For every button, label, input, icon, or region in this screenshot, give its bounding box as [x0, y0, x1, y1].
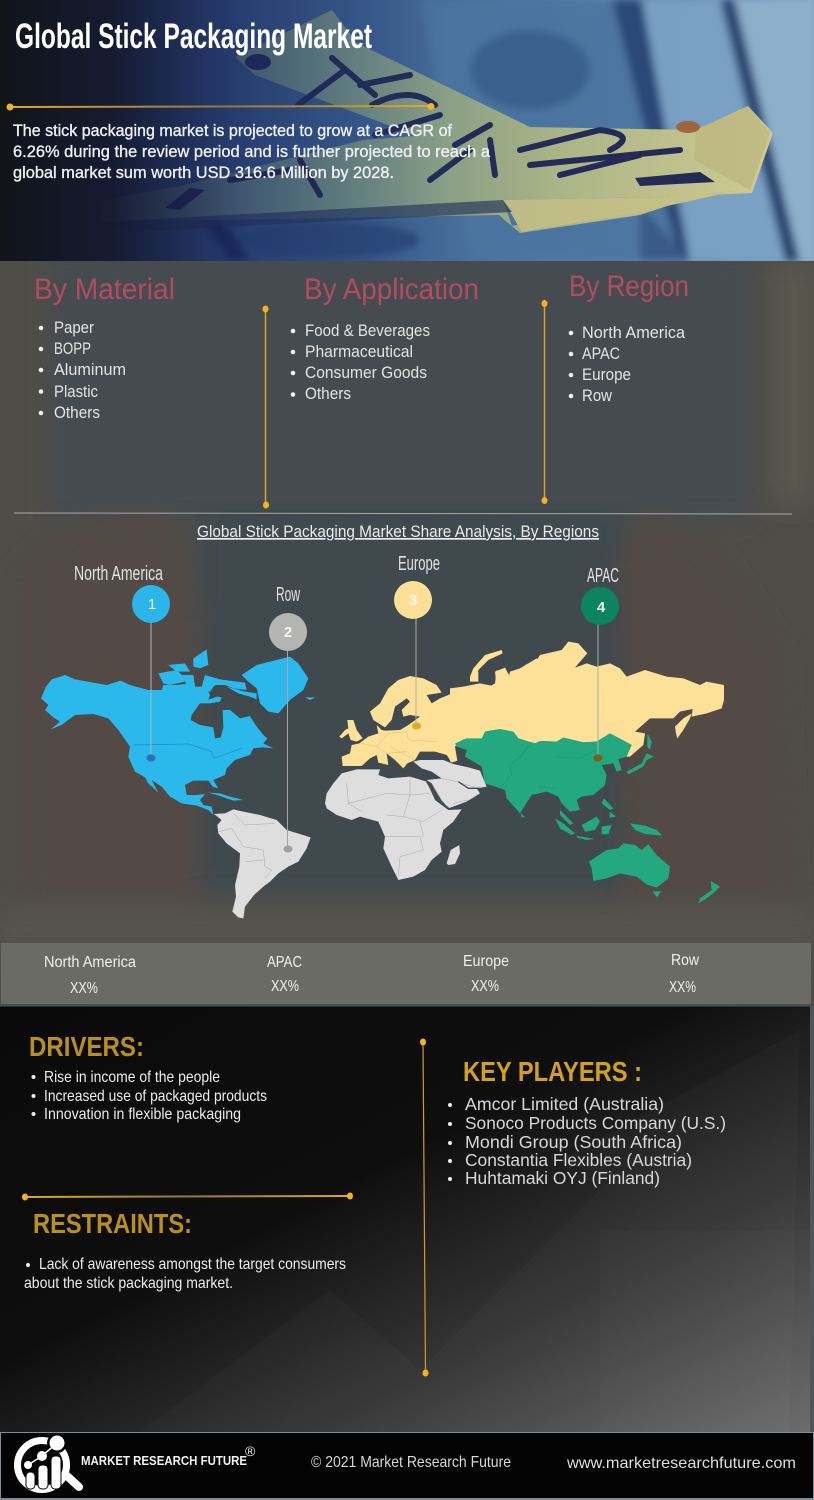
text block: drivers list	[32, 1069, 267, 1123]
panel: by application: Food & Beverages	[305, 321, 430, 340]
panel: market share table: XX%	[471, 978, 499, 995]
panel: by region	[569, 270, 689, 405]
panel: by material	[34, 273, 175, 422]
pin 4: apac	[581, 565, 619, 762]
text block: restraints: about the stick packaging market.	[24, 1275, 233, 1292]
pin 2: row	[269, 584, 307, 852]
panel: market share table: XX%	[70, 980, 98, 997]
region: africa and middle east	[325, 760, 487, 880]
panel: by application	[291, 273, 479, 403]
panel: by material: Aluminum	[54, 360, 126, 379]
pin 1: north america: 1	[148, 596, 156, 613]
footer bar	[0, 1432, 814, 1500]
pin 3: europe: 3	[409, 592, 417, 609]
panel: market share table	[1, 943, 811, 1004]
text block: hero summary: The stick packaging market is projected to grow at a CAGR of	[13, 121, 452, 140]
text block: hero summary: global market sum worth USD 316.6 Million by 2028.	[13, 163, 394, 182]
text block: key players list: Huhtamaki OYJ (Finland)	[465, 1168, 660, 1188]
footer bar: MARKET RESEARCH FUTURE	[81, 1454, 247, 1468]
text block: key players list	[448, 1094, 726, 1188]
panel: by material: Plastic	[54, 382, 98, 401]
footer bar: www.marketresearchfuture.com	[566, 1455, 796, 1472]
icon: market research future logo	[18, 1433, 79, 1490]
pin 1: north america	[74, 563, 170, 762]
panel: by region: North America	[582, 323, 686, 342]
text block: drivers list: Innovation in flexible packaging	[44, 1106, 241, 1123]
text block: hero summary	[13, 121, 491, 182]
title: Global Stick Packaging Market	[15, 17, 372, 56]
footer bar: ®	[245, 1443, 256, 1459]
region: south america	[214, 809, 311, 918]
footer bar: © 2021 Market Research Future	[311, 1454, 511, 1471]
text block: key players list: Constantia Flexibles (Austria)	[465, 1150, 692, 1170]
text block: key players list: Sonoco Products Company (U.S.)	[465, 1113, 726, 1133]
text block: hero summary: 6.26% during the review period and is further projected to reach a	[13, 142, 491, 161]
region: north america	[41, 649, 315, 815]
heading: key players: KEY PLAYERS :	[463, 1056, 642, 1087]
panel: by region: Europe	[582, 365, 631, 384]
panel: hero photo banner	[0, 0, 814, 261]
panel: market share table: XX%	[271, 978, 299, 995]
panel: by application: Pharmaceutical	[305, 342, 413, 361]
pin 4: apac: 4	[597, 599, 606, 616]
text block: restraints: Lack of awareness amongst the target consumers	[39, 1256, 346, 1273]
panel: by material: By Material	[34, 273, 175, 306]
region: apac	[455, 729, 720, 903]
panel: by region: By Region	[569, 270, 689, 303]
region: europe and russia	[339, 642, 724, 768]
panel: market share table: XX%	[669, 979, 696, 996]
text block: drivers list: Increased use of packaged products	[44, 1088, 267, 1105]
pin 2: row: 2	[284, 624, 292, 641]
divider: material application line	[262, 306, 269, 508]
divider: hero gold line	[6, 103, 434, 110]
chart: world map	[41, 642, 724, 918]
panel: market share table: North America	[44, 954, 136, 971]
text block: restraints	[24, 1256, 346, 1292]
panel: by material: BOPP	[54, 339, 91, 358]
picture: candy bars	[100, 10, 773, 233]
panel: market share table: Europe	[463, 953, 509, 970]
panel: by application: Others	[305, 384, 351, 403]
pin 4: apac: APAC	[587, 565, 619, 587]
text block: key players list: Mondi Group (South Africa)	[465, 1132, 682, 1152]
panel: segmentation and map background	[0, 250, 814, 1006]
text block: drivers list: Rise in income of the people	[44, 1069, 220, 1086]
text block: key players list: Amcor Limited (Australia)	[465, 1094, 664, 1114]
panel: by application: By Application	[304, 273, 479, 306]
divider: drivers restraints line	[22, 1192, 353, 1200]
pin 3: europe: Europe	[398, 553, 440, 575]
panel: drivers restraints key players background	[0, 1004, 814, 1433]
heading: map title: Global Stick Packaging Market Share Analysis, By Regions	[197, 522, 599, 541]
heading: drivers: DRIVERS:	[29, 1031, 144, 1062]
panel: by material: Paper	[54, 318, 94, 337]
panel: by region: APAC	[582, 344, 620, 363]
panel: by region: Row	[582, 386, 613, 405]
panel: by material: Others	[54, 403, 100, 422]
divider: vertical gold line	[420, 1038, 428, 1376]
divider: application region line	[542, 300, 548, 504]
pin 3: europe	[394, 553, 440, 730]
panel: market share table: Row	[671, 952, 700, 969]
pin 1: north america: North America	[74, 563, 164, 585]
picture: hangul print on wrapper	[230, 58, 680, 195]
pin 2: row: Row	[276, 584, 300, 606]
panel: market share table: APAC	[267, 954, 302, 971]
panel: by application: Consumer Goods	[305, 363, 427, 382]
heading: restraints: RESTRAINTS:	[33, 1208, 192, 1239]
